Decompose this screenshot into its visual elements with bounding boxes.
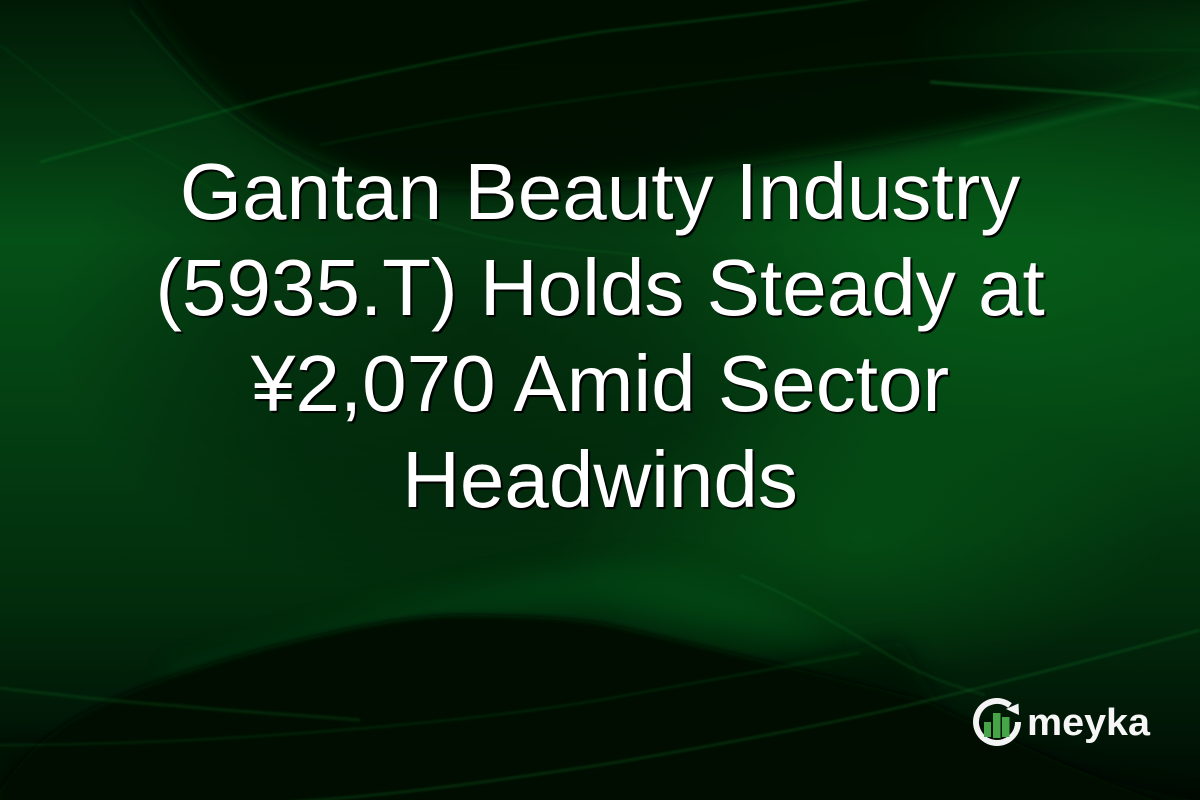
title <box>155 147 1047 524</box>
title: ¥2,070 Amid Sector <box>251 339 949 428</box>
wordmark: meyka <box>1027 702 1151 744</box>
logo: meyka <box>973 698 1151 746</box>
title: Gantan Beauty Industry <box>180 147 1020 236</box>
title: Headwinds <box>402 435 798 524</box>
title: (5935.T) Holds Steady at <box>155 243 1045 332</box>
icon: ring with bars <box>976 701 1019 743</box>
